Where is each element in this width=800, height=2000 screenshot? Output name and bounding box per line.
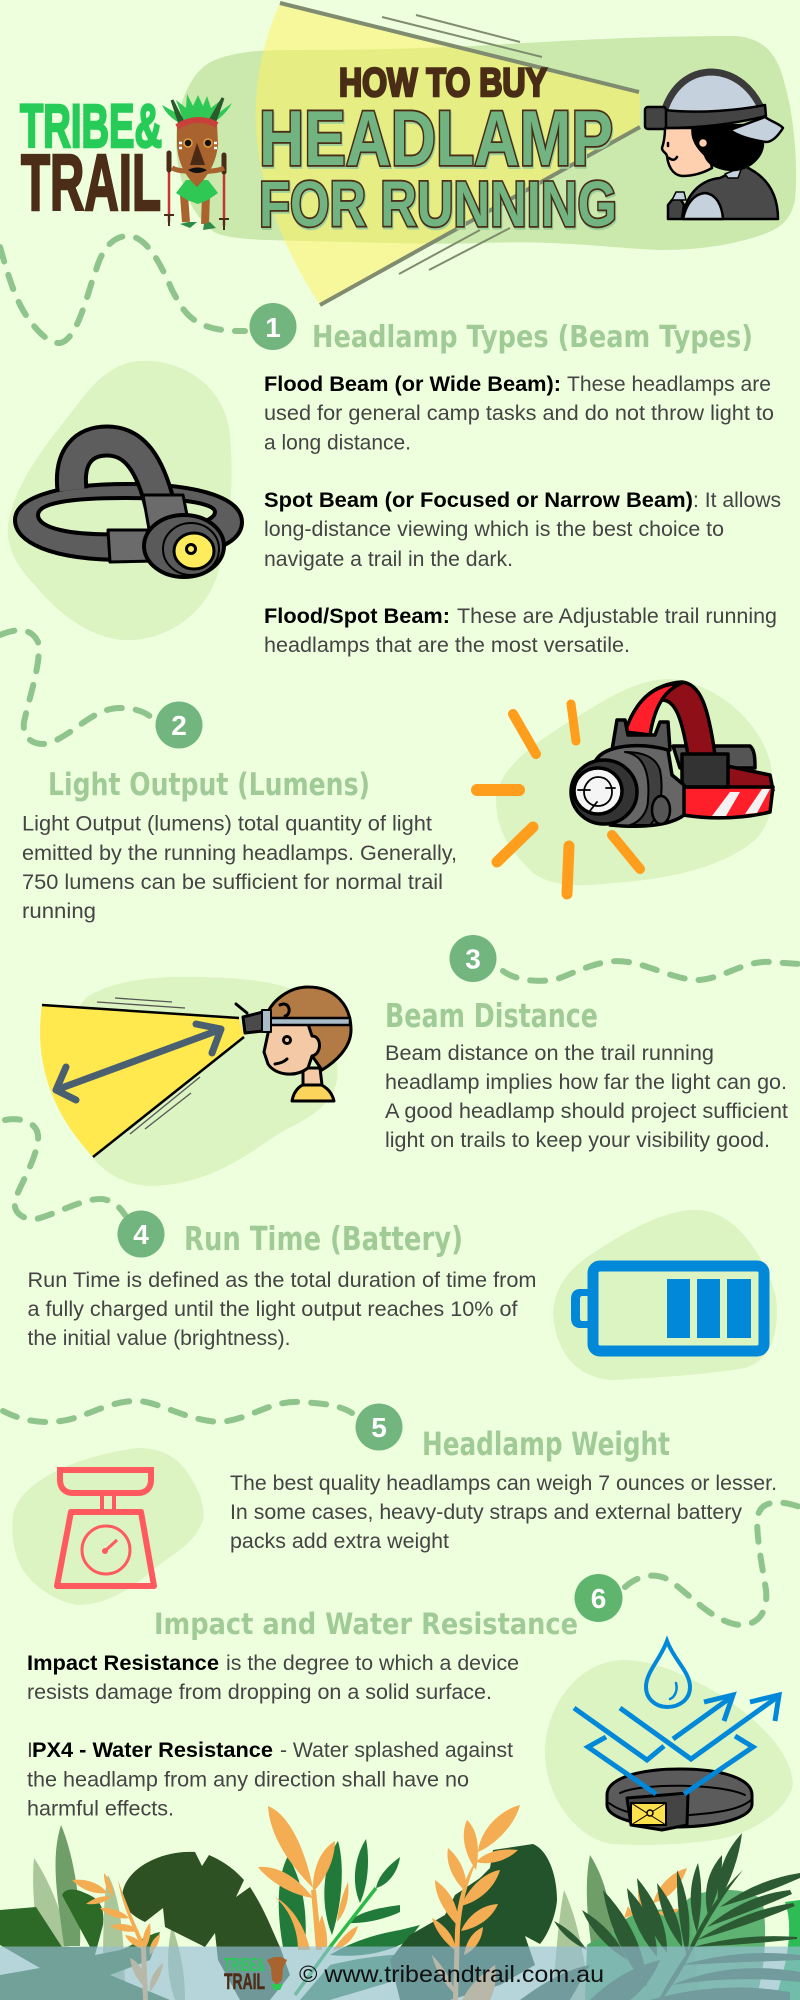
heading: beam distance: Beam Distance bbox=[385, 996, 598, 1035]
icon: water drop bbox=[646, 1641, 690, 1707]
flood beam paragraph: Flood Beam (or Wide Beam): bbox=[264, 373, 561, 396]
spot beam paragraph: navigate a trail in the dark. bbox=[264, 548, 513, 571]
title bbox=[259, 61, 617, 240]
flood/spot beam paragraph: Flood/Spot Beam: bbox=[264, 605, 450, 628]
number badge 6: 6 bbox=[591, 1583, 606, 1614]
text: run time: Run Time is defined as the total duration of time from bbox=[28, 1269, 536, 1292]
text: beam distance: Beam distance on the trail running bbox=[385, 1042, 714, 1065]
number badge 4: 4 bbox=[133, 1219, 149, 1250]
flood beam paragraph: a long distance. bbox=[264, 432, 411, 454]
section 4: run time bbox=[5, 1119, 777, 1380]
foliage: palm fronds bbox=[520, 1833, 800, 2000]
foliage: dark leaf right bbox=[390, 1844, 557, 2000]
heading: headlamp weight: Headlamp Weight bbox=[422, 1425, 670, 1463]
logo wordmark: TRIBE& bbox=[20, 92, 162, 160]
footer small logo: TRIBE& bbox=[224, 1955, 265, 1975]
footer strip bbox=[0, 1946, 800, 2000]
number badge 5: 5 bbox=[371, 1412, 387, 1443]
number badge 1 bbox=[250, 303, 296, 350]
icon: headlamp on belt bbox=[607, 1769, 752, 1830]
icon: waterproof arrows bbox=[574, 1695, 779, 1794]
foliage: orange behind palm bbox=[615, 1868, 687, 1958]
title line: how to buy: HOW TO BUY bbox=[339, 61, 547, 105]
footer website text: © www.tribeandtrail.com.au bbox=[299, 1961, 604, 1987]
title line: headlamp: HEADLAMP bbox=[259, 94, 613, 182]
icon: red headlamp bbox=[571, 682, 773, 826]
icon blob 3 bbox=[62, 977, 337, 1186]
text: light output bbox=[22, 812, 457, 923]
water resistance paragraph: the headlamp from any direction shall have no bbox=[27, 1768, 469, 1792]
section 2: light output bbox=[0, 630, 773, 923]
brand logo bbox=[20, 92, 232, 230]
footer small logo: TRAIL bbox=[224, 1969, 265, 1994]
icon: light rays bbox=[477, 704, 640, 894]
water resistance paragraph: I bbox=[27, 1739, 33, 1762]
number badge 2 bbox=[156, 702, 202, 748]
number badge 4 bbox=[118, 1210, 164, 1258]
text: run time bbox=[28, 1269, 536, 1350]
flood beam paragraph bbox=[264, 373, 774, 454]
icon: yellow beam with arrow bbox=[40, 998, 244, 1157]
connector dashed path 1 bbox=[0, 236, 245, 343]
spot beam paragraph: long-distance viewing which is the best choice to bbox=[264, 518, 724, 541]
icon blob 4 bbox=[553, 1210, 777, 1380]
heading: light output: Light Output (Lumens) bbox=[48, 767, 370, 803]
flood/spot beam paragraph: These are Adjustable trail running bbox=[457, 605, 777, 628]
icon: grey headlamp bbox=[15, 441, 242, 577]
connector dashed path 2 bbox=[0, 630, 156, 744]
foliage: bright stem bbox=[295, 1888, 376, 1995]
flood beam paragraph: These headlamps are bbox=[567, 373, 771, 396]
icon: runner with headlamp bbox=[645, 72, 783, 219]
impact resistance paragraph: resists damage from dropping on a solid surface. bbox=[27, 1681, 492, 1704]
text: headlamp weight bbox=[230, 1472, 777, 1553]
impact resistance paragraph bbox=[27, 1652, 519, 1704]
text: run time: the initial value (brightness). bbox=[28, 1327, 290, 1350]
foliage: grey-green leaves bbox=[56, 1825, 615, 1950]
text: headlamp weight: packs add extra weight bbox=[230, 1530, 449, 1553]
foliage footer bbox=[0, 1805, 800, 2000]
heading: impact and water resistance: Impact and Water Resistance bbox=[154, 1607, 578, 1641]
section 6: impact and water resistance bbox=[27, 1502, 800, 1845]
connector dashed path 4 bbox=[5, 1119, 125, 1219]
logo wordmark bbox=[20, 92, 162, 227]
header panel bbox=[20, 3, 796, 305]
spot beam paragraph: : It allows bbox=[693, 489, 781, 512]
footer small logo bbox=[224, 1955, 287, 1994]
flood/spot beam paragraph bbox=[264, 605, 777, 657]
water resistance paragraph: harmful effects. bbox=[27, 1798, 174, 1820]
flood/spot beam paragraph: headlamps that are the most versatile. bbox=[264, 634, 630, 657]
foliage: green mounds bbox=[585, 1890, 800, 2000]
foliage: big monstera leaf bbox=[122, 1852, 290, 2000]
text: light output: 750 lumens can be sufficient for normal trail bbox=[22, 871, 443, 894]
light beam bbox=[256, 3, 640, 305]
icon blob 6 bbox=[545, 1660, 793, 1845]
heading: run time: Run Time (Battery) bbox=[184, 1219, 463, 1258]
text: headlamp weight: In some cases, heavy-duty straps and external battery bbox=[230, 1501, 742, 1524]
icon blob 1 bbox=[8, 361, 232, 640]
spot beam paragraph bbox=[264, 489, 781, 571]
water resistance paragraph bbox=[27, 1739, 513, 1820]
text: run time: a fully charged until the light output reaches 10% of bbox=[28, 1298, 518, 1321]
text: light output: Light Output (lumens) total quantity of light bbox=[22, 812, 432, 836]
icon blob 2 bbox=[496, 679, 773, 885]
text: beam distance: A good headlamp should project sufficient bbox=[385, 1100, 788, 1123]
connector dashed path 5 bbox=[3, 1401, 352, 1422]
tiki mascot bbox=[162, 94, 232, 230]
number badge 3 bbox=[450, 935, 496, 982]
icon: battery bbox=[571, 1266, 764, 1351]
number badge 3: 3 bbox=[465, 944, 481, 974]
text: light output: emitted by the running headlamps. Generally, bbox=[22, 842, 457, 865]
impact resistance paragraph: Impact Resistance bbox=[27, 1652, 219, 1675]
foliage: pale leaves bbox=[33, 1858, 590, 2000]
text: beam distance: headlamp implies how far the light can go. bbox=[385, 1071, 787, 1094]
flood beam paragraph: used for general camp tasks and do not throw light to bbox=[264, 402, 774, 425]
icon: weighing scale bbox=[57, 1470, 154, 1586]
water resistance paragraph: PX4 - Water Resistance bbox=[32, 1739, 273, 1762]
logo wordmark: TRAIL bbox=[21, 138, 161, 227]
icon blob 5 bbox=[13, 1448, 203, 1605]
title line: for running: FOR RUNNING bbox=[259, 168, 617, 240]
number badge 6 bbox=[574, 1574, 622, 1622]
number badge 1: 1 bbox=[265, 312, 281, 343]
foliage: orange sprig left bbox=[72, 1873, 163, 2000]
section 1: headlamp types bbox=[0, 236, 781, 657]
text: light output: running bbox=[22, 900, 96, 923]
foliage: orange sprig right bbox=[432, 1805, 520, 2000]
text: headlamp weight: The best quality headlamps can weigh 7 ounces or lesser. bbox=[230, 1472, 777, 1495]
number badge 2: 2 bbox=[171, 710, 187, 741]
impact resistance paragraph: is the degree to which a device bbox=[226, 1652, 519, 1675]
icon: person with headlamp bbox=[236, 987, 351, 1101]
foliage: orange sprig centre bbox=[258, 1806, 358, 1950]
text: beam types bbox=[264, 373, 781, 657]
foliage: green leaves centre-left bbox=[279, 1839, 440, 2000]
water resistance paragraph: - Water splashed against bbox=[280, 1739, 513, 1762]
section 3: beam distance bbox=[40, 935, 800, 1186]
connector dashed path 3 bbox=[503, 961, 800, 981]
text: impact and water resistance bbox=[27, 1652, 519, 1820]
connector dashed path 6 bbox=[625, 1502, 800, 1625]
header green blob bbox=[176, 36, 796, 250]
spot beam paragraph: Spot Beam (or Focused or Narrow Beam) bbox=[264, 489, 693, 512]
text: beam distance bbox=[385, 1042, 788, 1152]
section 5: headlamp weight bbox=[3, 1401, 777, 1605]
foliage: dark left fronds bbox=[0, 1889, 170, 2000]
text: beam distance: light on trails to keep your visibility good. bbox=[385, 1129, 770, 1152]
number badge 5 bbox=[356, 1404, 402, 1450]
